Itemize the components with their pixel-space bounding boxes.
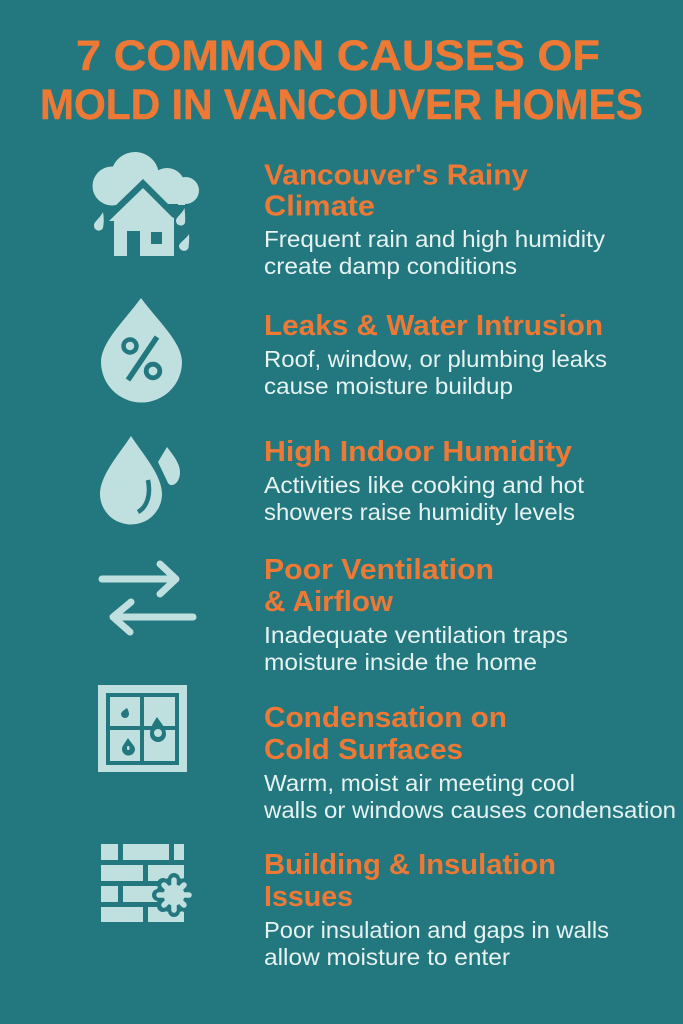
icon: brick wall with mold xyxy=(101,844,192,922)
heading and text: condensation: walls or windows causes condensation xyxy=(263,797,676,823)
heading and text: building issues: Poor insulation and gaps in walls xyxy=(264,917,609,943)
heading and text: building issues: allow moisture to enter xyxy=(264,944,510,970)
heading and text: humidity xyxy=(264,436,585,525)
title xyxy=(40,32,643,129)
heading and text: rainy climate: Climate xyxy=(264,190,375,222)
mold splat xyxy=(156,877,192,913)
heading and text: humidity: Activities like cooking and hot xyxy=(264,472,585,498)
heading and text: rainy climate: create damp conditions xyxy=(264,253,517,279)
heading and text: building issues: Building & Insulation xyxy=(264,849,556,881)
icon: water drop with percent xyxy=(101,298,182,402)
heading and text: humidity: High Indoor Humidity xyxy=(264,436,572,468)
heading and text: condensation: Warm, moist air meeting cool xyxy=(264,770,575,796)
title: 7 COMMON CAUSES OF xyxy=(76,32,600,80)
heading and text: rainy climate: Frequent rain and high humidity xyxy=(264,226,606,252)
heading and text: ventilation: Inadequate ventilation traps xyxy=(264,622,568,648)
heading and text: leaks xyxy=(264,310,607,399)
heading and text: leaks: cause moisture buildup xyxy=(264,373,513,399)
heading and text: leaks: Leaks & Water Intrusion xyxy=(264,310,603,342)
heading and text: rainy climate xyxy=(264,160,606,279)
heading and text: ventilation: moisture inside the home xyxy=(264,649,537,675)
heading and text: condensation: Cold Surfaces xyxy=(264,734,463,766)
heading and text: condensation xyxy=(263,702,676,823)
icon: window with condensation xyxy=(98,685,187,772)
heading and text: ventilation xyxy=(264,554,568,675)
heading and text: building issues: Issues xyxy=(264,881,353,913)
heading and text: humidity: showers raise humidity levels xyxy=(264,499,575,525)
heading and text: ventilation: & Airflow xyxy=(264,586,393,618)
title: MOLD IN VANCOUVER HOMES xyxy=(40,81,643,129)
heading and text: rainy climate: Vancouver's Rainy xyxy=(264,160,528,192)
icon: humidity drops xyxy=(100,436,180,524)
icon: rain cloud over house xyxy=(92,152,199,256)
icon: airflow arrows xyxy=(102,564,193,632)
heading and text: ventilation: Poor Ventilation xyxy=(264,554,494,586)
heading and text: building issues xyxy=(264,849,609,970)
heading and text: condensation: Condensation on xyxy=(264,702,507,734)
heading and text: leaks: Roof, window, or plumbing leaks xyxy=(264,346,607,372)
